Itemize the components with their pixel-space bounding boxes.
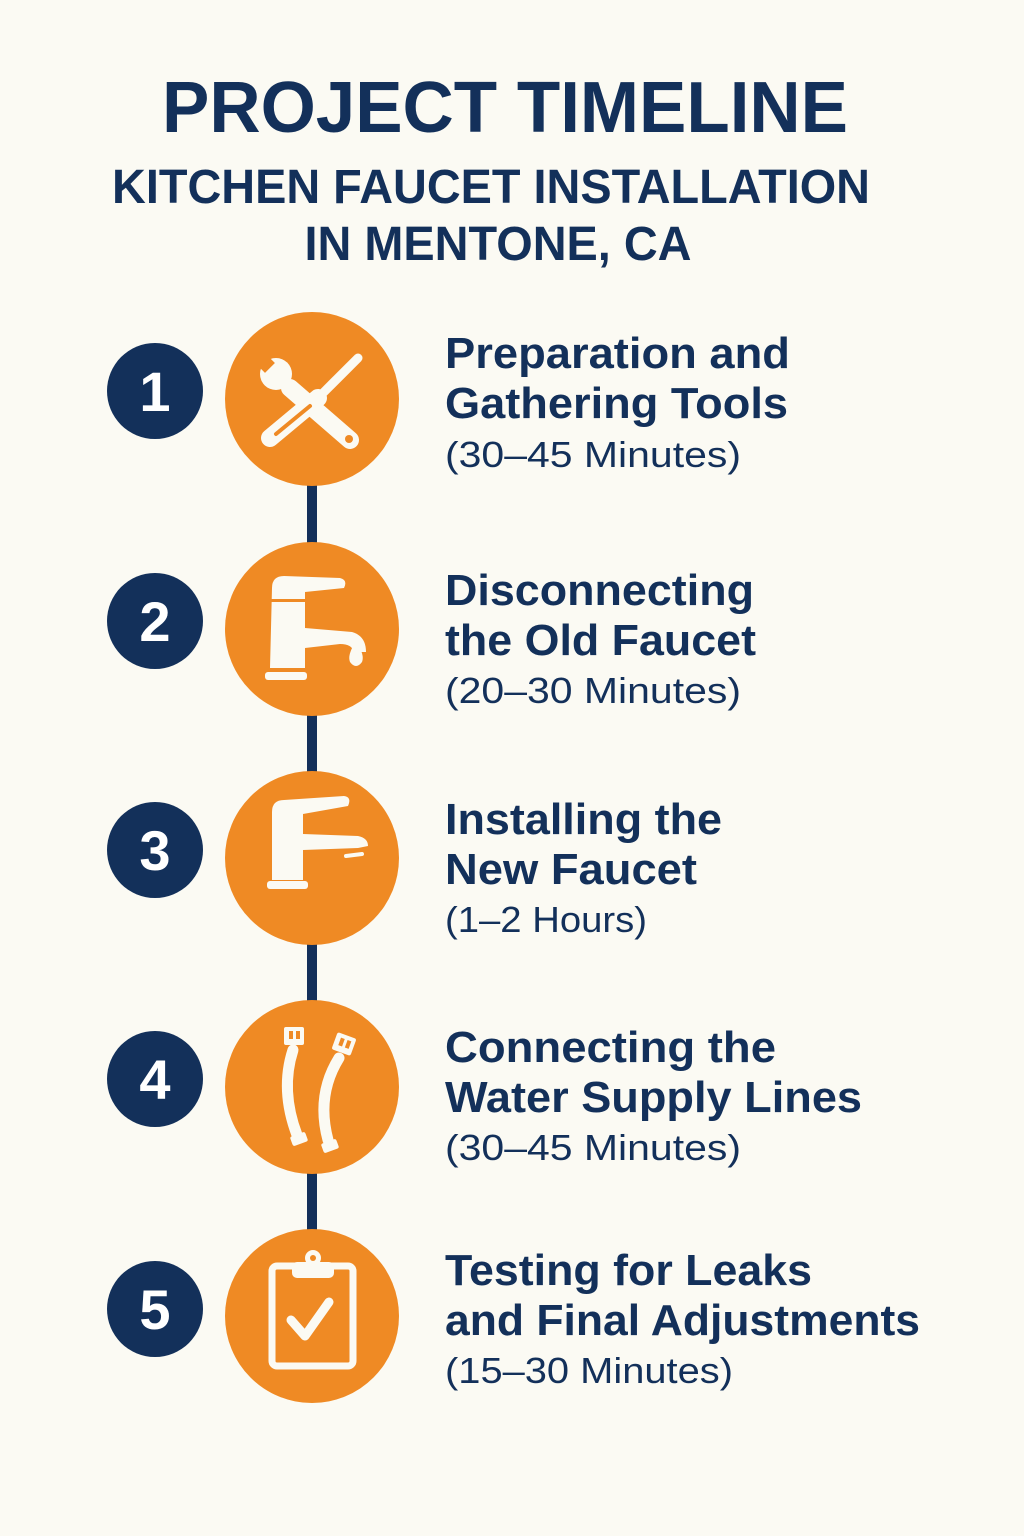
icon: dripping faucet — [225, 542, 399, 716]
step 5 text — [445, 1246, 920, 1391]
step 3 — [107, 771, 722, 945]
subtitle: KITCHEN FAUCET INSTALLATION — [112, 161, 870, 214]
number badge 1: 1 — [139, 360, 171, 423]
step 2 text — [445, 566, 756, 711]
step 3 text: (1–2 Hours) — [445, 899, 647, 940]
number badge 5 — [107, 1261, 203, 1357]
step 1 text — [445, 329, 790, 475]
number badge 3: 3 — [139, 819, 171, 882]
number badge 1 — [107, 343, 203, 439]
step 4 text: Water Supply Lines — [445, 1073, 862, 1122]
timeline connector line — [307, 470, 317, 1250]
step 4 text: (30–45 Minutes) — [445, 1127, 741, 1168]
number badge 5: 5 — [139, 1278, 171, 1341]
step 4 text — [445, 1023, 862, 1168]
step 2 text: (20–30 Minutes) — [445, 670, 741, 711]
step 3 text: Installing the — [445, 795, 722, 844]
step 1 — [107, 312, 790, 486]
title: PROJECT TIMELINE — [162, 68, 848, 148]
step 2 — [107, 542, 756, 716]
subtitle — [112, 161, 870, 271]
number badge 2: 2 — [139, 590, 171, 653]
icon: tools — [225, 312, 399, 486]
number badge 3 — [107, 802, 203, 898]
step 1 text: (30–45 Minutes) — [445, 434, 741, 475]
step 4 text: Connecting the — [445, 1023, 776, 1072]
step 1 text: Gathering Tools — [445, 379, 788, 428]
step 5 text: and Final Adjustments — [445, 1296, 920, 1345]
number badge 2 — [107, 573, 203, 669]
step 5 text: Testing for Leaks — [445, 1246, 812, 1295]
number badge 4: 4 — [139, 1048, 171, 1111]
icon: new faucet — [225, 771, 399, 945]
number badge 4 — [107, 1031, 203, 1127]
step 2 text: the Old Faucet — [445, 616, 756, 665]
step 1 text: Preparation and — [445, 329, 790, 378]
step 2 text: Disconnecting — [445, 566, 754, 615]
step 5 — [107, 1229, 920, 1403]
icon: supply hoses — [225, 1000, 399, 1174]
subtitle: IN MENTONE, CA — [304, 218, 692, 271]
step 3 text: New Faucet — [445, 845, 697, 894]
icon: clipboard check — [225, 1229, 399, 1403]
step 5 text: (15–30 Minutes) — [445, 1350, 733, 1391]
step 3 text — [445, 795, 722, 940]
step 4 — [107, 1000, 862, 1174]
